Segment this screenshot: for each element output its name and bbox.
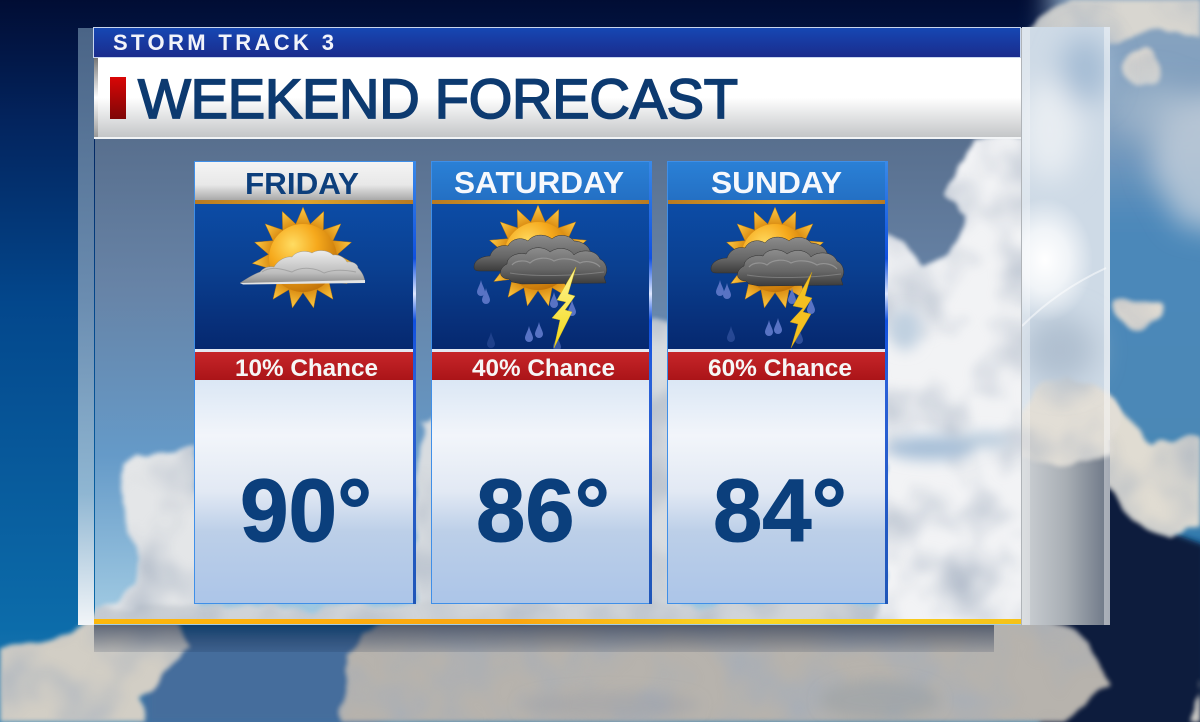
panel: Sunday bbox=[667, 161, 888, 604]
title bar bbox=[94, 58, 1021, 139]
day header: FRIDAY bbox=[245, 166, 359, 201]
side glass panel right bbox=[997, 27, 1110, 625]
icon: sun behind white cloud bbox=[240, 207, 365, 310]
chance bar bbox=[195, 349, 413, 382]
chance bar bbox=[432, 349, 649, 382]
panel: Saturday bbox=[431, 161, 652, 604]
temperature: 86° bbox=[476, 460, 610, 560]
day header: SUNDAY bbox=[711, 165, 842, 200]
temperature bbox=[195, 380, 413, 603]
icon: storm cloud, rain and lightning bbox=[474, 205, 607, 351]
temperature bbox=[668, 380, 885, 603]
header bar: storm track 3 bbox=[94, 28, 1020, 58]
chance bar: 40% Chance bbox=[472, 355, 615, 382]
gold base line bbox=[94, 619, 1021, 624]
chance bar bbox=[668, 349, 885, 382]
icon: storm cloud, rain and lightning bbox=[711, 207, 844, 348]
main panel backdrop with clouds bbox=[95, 28, 1035, 640]
panel: Friday bbox=[194, 161, 416, 604]
chance bar: 60% Chance bbox=[708, 355, 852, 382]
icon background bbox=[668, 204, 885, 349]
shadow below panel bbox=[94, 625, 994, 652]
icon background bbox=[195, 204, 413, 349]
chance bar: 10% Chance bbox=[235, 355, 378, 382]
day header bbox=[668, 162, 885, 200]
cloud backdrop behind side glass bbox=[1015, 27, 1112, 625]
temperature: 84° bbox=[713, 460, 847, 560]
icon background bbox=[432, 204, 649, 349]
title: WEEKEND FORECAST bbox=[138, 67, 738, 130]
day header bbox=[195, 162, 413, 201]
header bar: storm track 3: STORM TRACK 3 bbox=[113, 30, 334, 55]
day header: SATURDAY bbox=[454, 165, 624, 200]
temperature bbox=[432, 380, 649, 603]
left glass strip bbox=[78, 28, 94, 625]
red tab bbox=[110, 77, 126, 119]
temperature: 90° bbox=[240, 460, 372, 560]
